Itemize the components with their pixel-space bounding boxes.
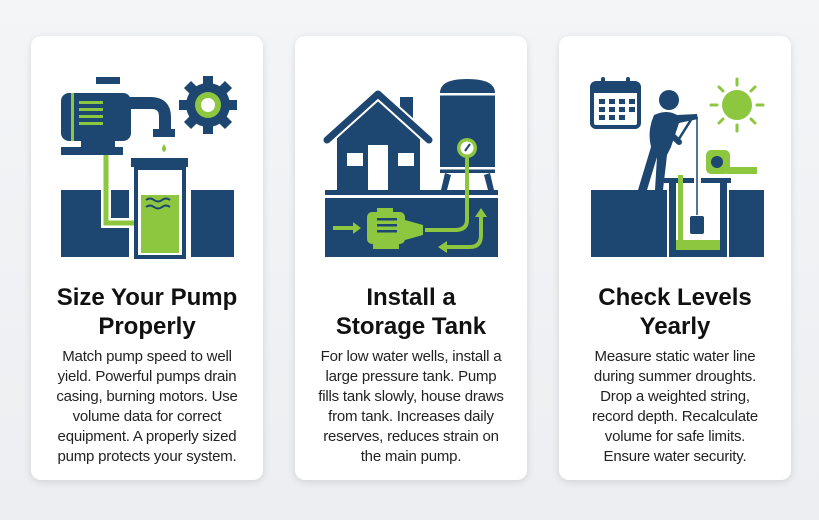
text block: For low water wells, install a (321, 348, 501, 365)
text block: yield. Powerful pumps drain (58, 368, 236, 385)
heading (57, 284, 237, 340)
text block (56, 348, 238, 465)
text block (318, 348, 504, 465)
text block: pump protects your system. (57, 448, 237, 465)
heading (598, 284, 752, 340)
heading (336, 284, 486, 340)
heading: Size Your Pump (57, 284, 237, 311)
text block (592, 348, 758, 465)
panel: check levels (559, 36, 791, 480)
text block: volume for safe limits. (605, 428, 745, 445)
text block: volume data for correct (73, 408, 221, 425)
panel: size your pump (31, 36, 263, 480)
text block: large pressure tank. Pump (326, 368, 496, 385)
heading: Storage Tank (336, 313, 486, 340)
text block: equipment. A properly sized (58, 428, 236, 445)
text block: casing, burning motors. Use (56, 388, 238, 405)
heading: Properly (98, 313, 196, 340)
text block: fills tank slowly, house draws (318, 388, 504, 405)
text block: reserves, reduces strain on (323, 428, 499, 445)
panel: storage tank (295, 36, 527, 480)
icon: house tank pump (324, 79, 498, 257)
text block: Measure static water line (595, 348, 755, 365)
text block: during summer droughts. (594, 368, 756, 385)
text block: the main pump. (361, 448, 461, 465)
icon: pump and well (61, 76, 237, 259)
heading: Yearly (640, 313, 710, 340)
text block: Ensure water security. (604, 448, 746, 465)
icon: person measuring well (590, 77, 764, 257)
heading: Install a (366, 284, 456, 311)
heading: Check Levels (598, 284, 752, 311)
text block: record depth. Recalculate (592, 408, 758, 425)
text block: Match pump speed to well (62, 348, 232, 365)
text block: Drop a weighted string, (600, 388, 750, 405)
text block: from tank. Increases daily (328, 408, 494, 425)
